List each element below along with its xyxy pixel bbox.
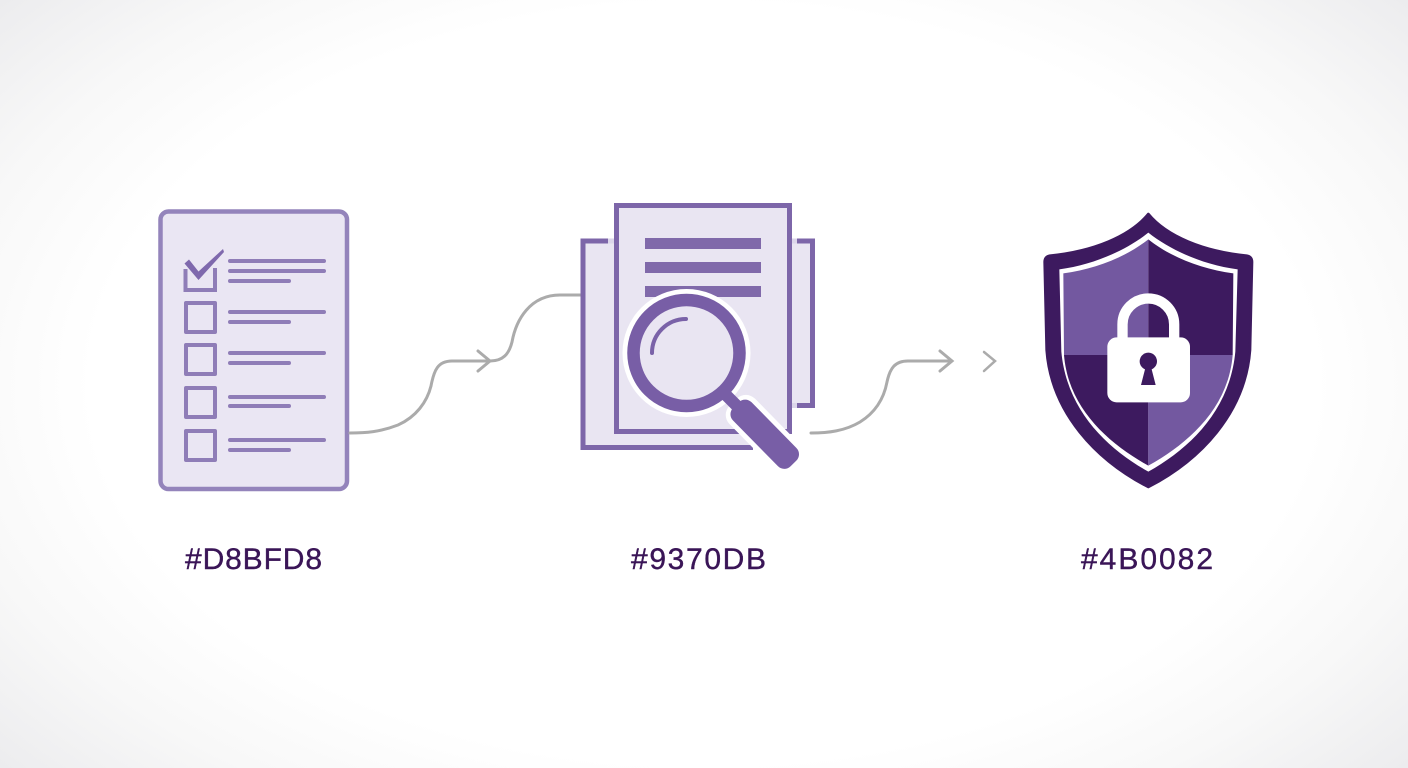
- label: checklist colour: #D8BFD8: [185, 543, 322, 576]
- icon: back pages: [583, 238, 812, 448]
- label: review colour: #9370DB: [631, 543, 766, 576]
- label: shield colour: #4B0082: [1081, 543, 1213, 576]
- arrow: chevron: [984, 352, 995, 371]
- icon: security shield with padlock: [1045, 214, 1252, 487]
- arrow: checklist to review: [350, 295, 581, 433]
- icon: front page with text bars: [616, 206, 790, 432]
- icon: magnifying glass: [622, 289, 809, 479]
- arrow: review to shield: [811, 351, 952, 433]
- icon: checklist document: [160, 212, 347, 489]
